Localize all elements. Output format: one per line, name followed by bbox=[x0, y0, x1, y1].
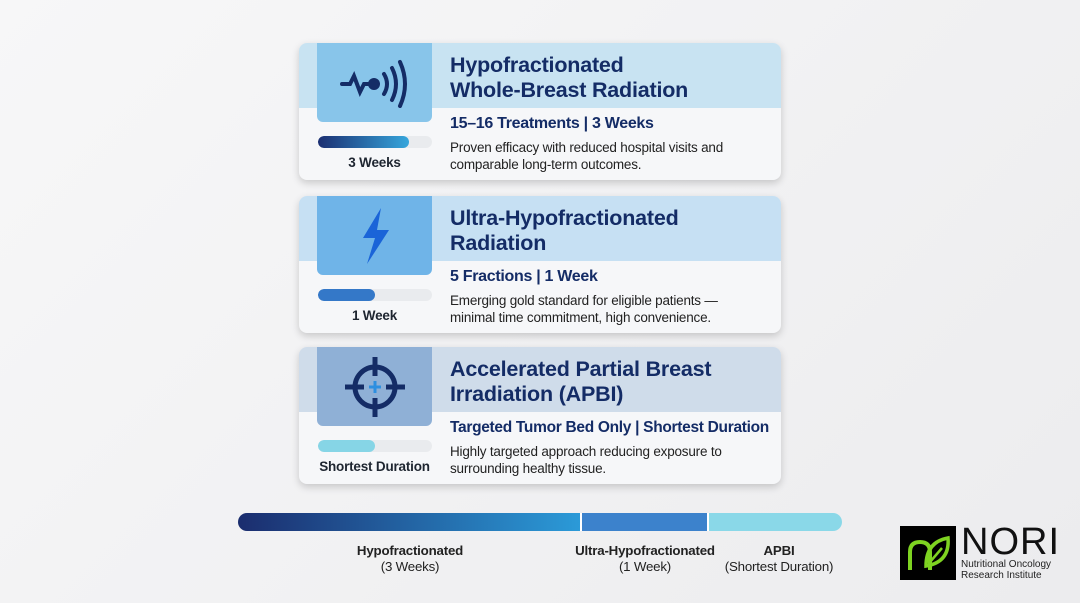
heading bbox=[450, 357, 712, 406]
timeline label: hypo: (3 Weeks) bbox=[381, 559, 439, 574]
description: Proven efficacy with reduced hospital visits and bbox=[450, 140, 723, 155]
duration label: 1 Week bbox=[352, 308, 397, 323]
heading: Hypofractionated bbox=[450, 53, 624, 77]
description: surrounding healthy tissue. bbox=[450, 461, 606, 476]
heading: Radiation bbox=[450, 231, 546, 255]
timeline label: APBI: APBI bbox=[764, 543, 794, 558]
icon: target bbox=[317, 347, 432, 426]
logo: NORI bbox=[900, 521, 1060, 581]
progress bar bbox=[318, 440, 432, 452]
heading: Irradiation (APBI) bbox=[450, 382, 623, 406]
description: Highly targeted approach reducing exposure to bbox=[450, 444, 722, 459]
progress bar bbox=[318, 289, 432, 301]
header band bbox=[299, 347, 781, 412]
card: APBI bbox=[299, 347, 781, 484]
timeline label: hypo: Hypofractionated bbox=[357, 543, 463, 558]
timeline label: hypo bbox=[357, 543, 463, 574]
subheading: 15–16 Treatments | 3 Weeks bbox=[450, 115, 654, 132]
header band bbox=[299, 196, 781, 261]
duration label: Shortest Duration bbox=[319, 459, 430, 474]
icon: lightning bbox=[317, 196, 432, 275]
logo: NORI: Research Institute bbox=[961, 570, 1042, 581]
timeline label: APBI: (Shortest Duration) bbox=[725, 559, 833, 574]
card: hypofractionated bbox=[299, 43, 781, 180]
subheading: 5 Fractions | 1 Week bbox=[450, 268, 598, 285]
heading: Accelerated Partial Breast bbox=[450, 357, 711, 381]
description bbox=[450, 444, 722, 476]
duration label: 3 Weeks bbox=[348, 155, 401, 170]
heading bbox=[450, 53, 688, 102]
description: Emerging gold standard for eligible patients — bbox=[450, 293, 718, 308]
icon: signal waves bbox=[317, 43, 432, 122]
subheading: Targeted Tumor Bed Only | Shortest Duration bbox=[450, 419, 769, 436]
progress bar bbox=[318, 136, 432, 148]
heading: Whole-Breast Radiation bbox=[450, 78, 688, 102]
timeline label: APBI bbox=[725, 543, 833, 574]
description bbox=[450, 140, 723, 172]
timeline label: ultra bbox=[575, 543, 715, 574]
description bbox=[450, 293, 718, 325]
header band bbox=[299, 43, 781, 108]
timeline label: ultra: Ultra-Hypofractionated bbox=[575, 543, 715, 558]
logo: NORI: NORI bbox=[961, 521, 1060, 563]
description: comparable long-term outcomes. bbox=[450, 157, 641, 172]
heading bbox=[450, 206, 679, 255]
logo: NORI: Nutritional Oncology bbox=[961, 559, 1051, 570]
card: ultra-hypofractionated bbox=[299, 196, 781, 333]
description: minimal time commitment, high convenience. bbox=[450, 310, 711, 325]
timeline bar bbox=[238, 513, 842, 531]
timeline label: ultra: (1 Week) bbox=[619, 559, 671, 574]
heading: Ultra-Hypofractionated bbox=[450, 206, 679, 230]
